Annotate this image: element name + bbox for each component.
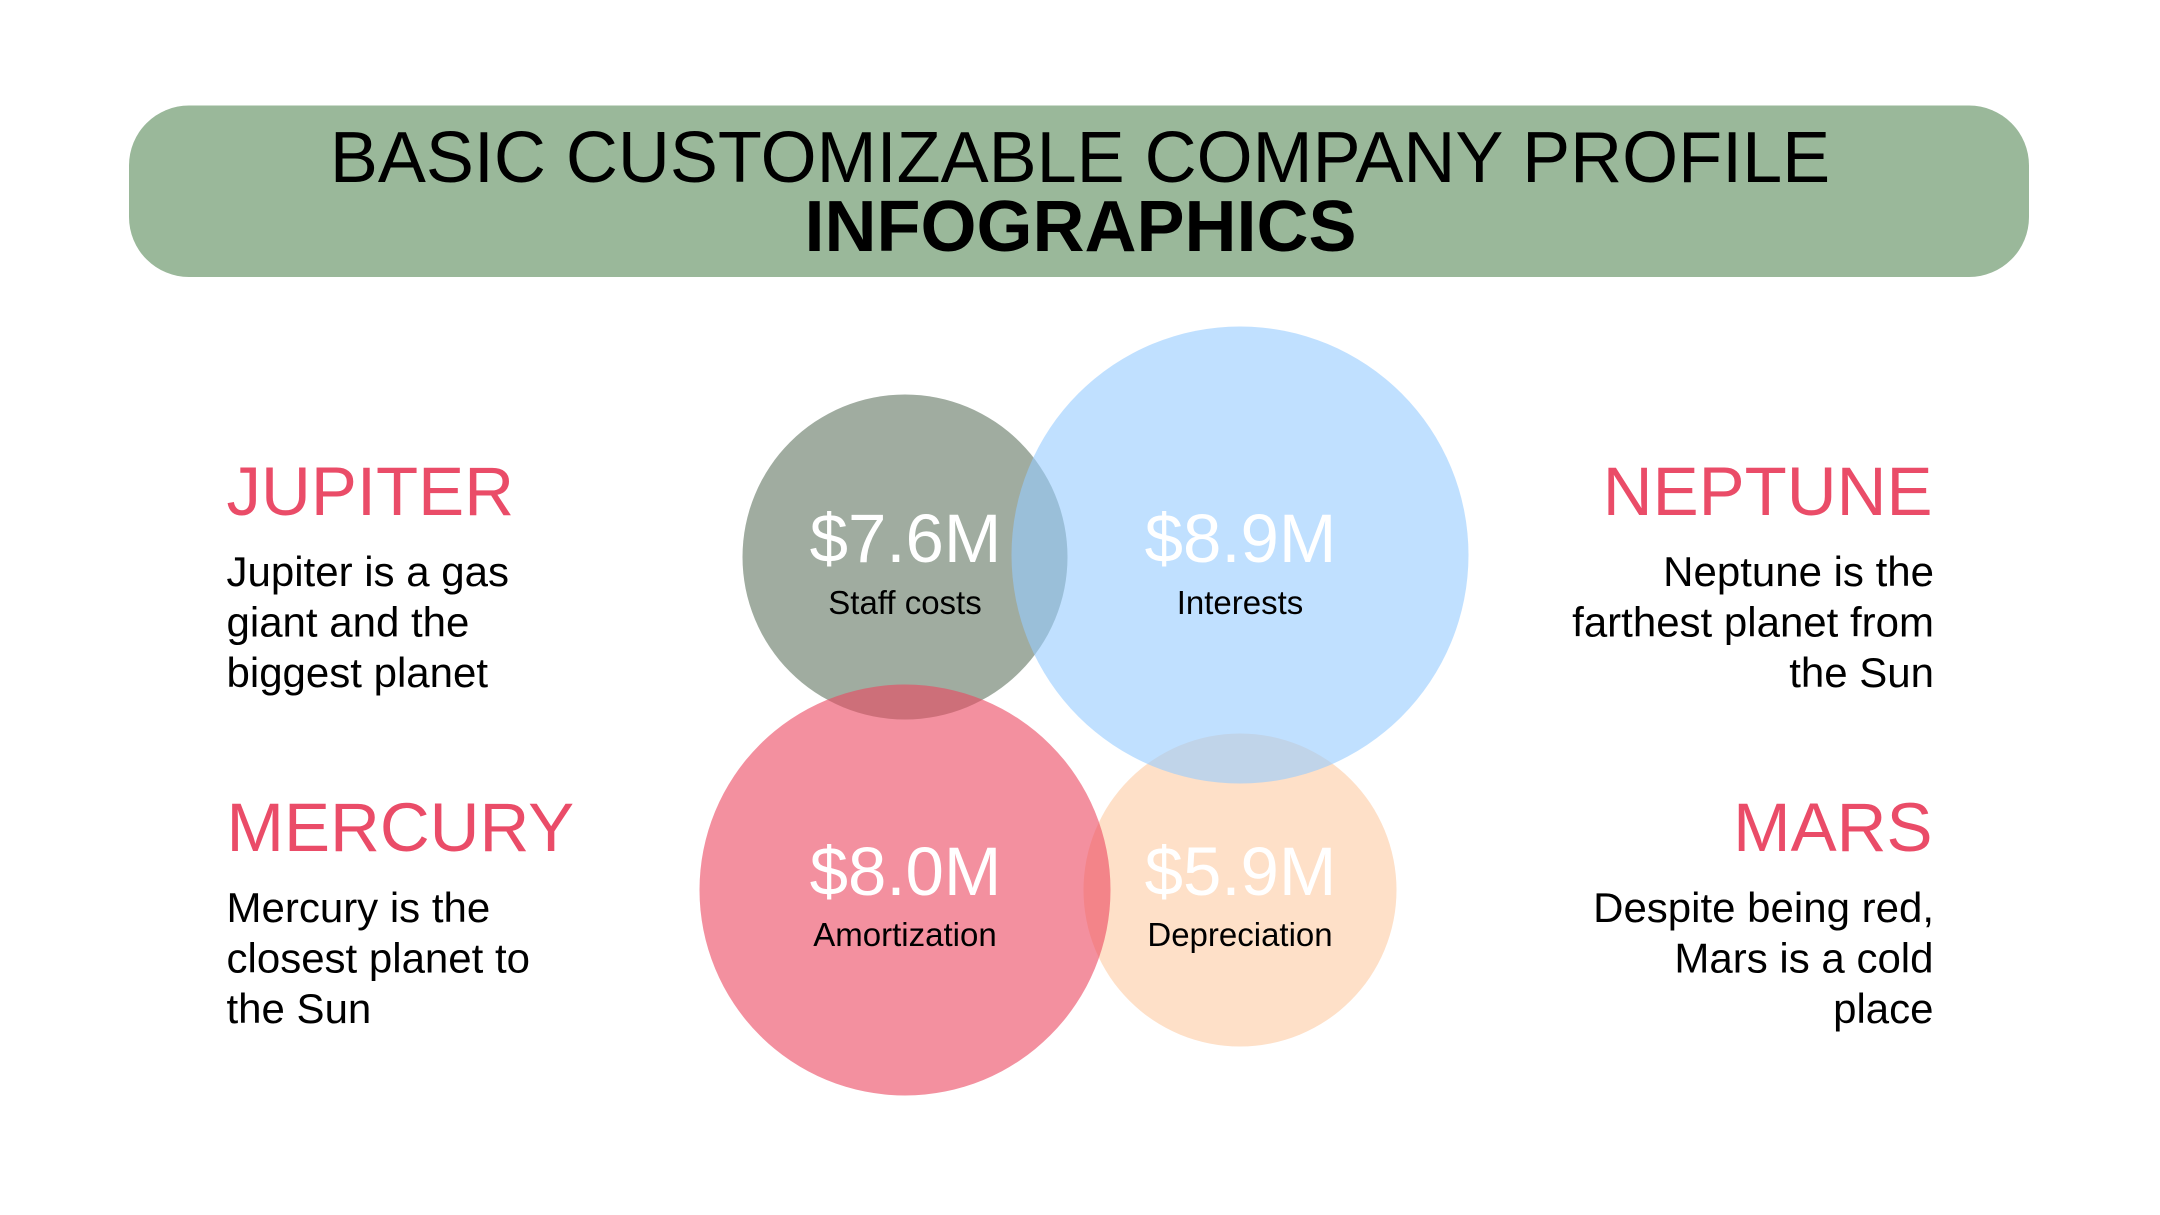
text block: Jupiter: giant and the [226, 598, 469, 646]
metric: depreciation: Depreciation [1147, 916, 1333, 953]
title banner [129, 106, 2029, 277]
metric: depreciation [1145, 833, 1336, 953]
metric: interests: Interests [1177, 584, 1303, 621]
text block: Mars: MARS [1733, 789, 1932, 866]
text block: Neptune [1572, 453, 1934, 696]
title banner: BASIC CUSTOMIZABLE COMPANY PROFILE [330, 118, 1830, 198]
circle: staff costs [742, 394, 1068, 720]
metric: staff costs: Staff costs [828, 584, 982, 621]
text block: Mars: Despite being red, [1593, 884, 1934, 931]
text block: Mercury: MERCURY [226, 789, 574, 866]
text block: Jupiter: biggest planet [226, 649, 488, 696]
text block: Jupiter: Jupiter is a gas [226, 548, 509, 595]
venn circles [700, 326, 1468, 1096]
text block: Mercury: closest planet to [226, 934, 530, 982]
metric: interests: $8.9M [1145, 500, 1336, 577]
text block: Mars: Mars is a cold [1674, 934, 1934, 982]
text block: Jupiter [226, 453, 514, 696]
metric: staff costs: $7.6M [810, 500, 1001, 577]
circle: interests [1012, 326, 1468, 784]
text block: Neptune: the Sun [1789, 649, 1934, 696]
metric: amortization: $8.0M [810, 833, 1001, 910]
text block: Neptune: NEPTUNE [1603, 453, 1932, 530]
text block: Mercury: the Sun [226, 985, 371, 1032]
text block: Neptune: farthest planet from [1572, 598, 1934, 646]
text block: Mercury: Mercury is the [226, 884, 490, 931]
text block: Jupiter: JUPITER [226, 453, 514, 530]
text block: Mars: place [1833, 985, 1934, 1032]
metric: amortization [810, 833, 1001, 953]
text block: Mercury [226, 789, 574, 1032]
title banner: INFOGRAPHICS [804, 187, 1357, 267]
metric: interests [1145, 500, 1336, 621]
circle: depreciation [1084, 734, 1396, 1046]
metric: amortization: Amortization [813, 916, 997, 953]
metric: staff costs [810, 500, 1001, 621]
text block: Neptune: Neptune is the [1663, 548, 1934, 595]
text block: Mars [1593, 789, 1934, 1032]
circle: amortization [700, 684, 1110, 1096]
metric: depreciation: $5.9M [1145, 833, 1336, 910]
